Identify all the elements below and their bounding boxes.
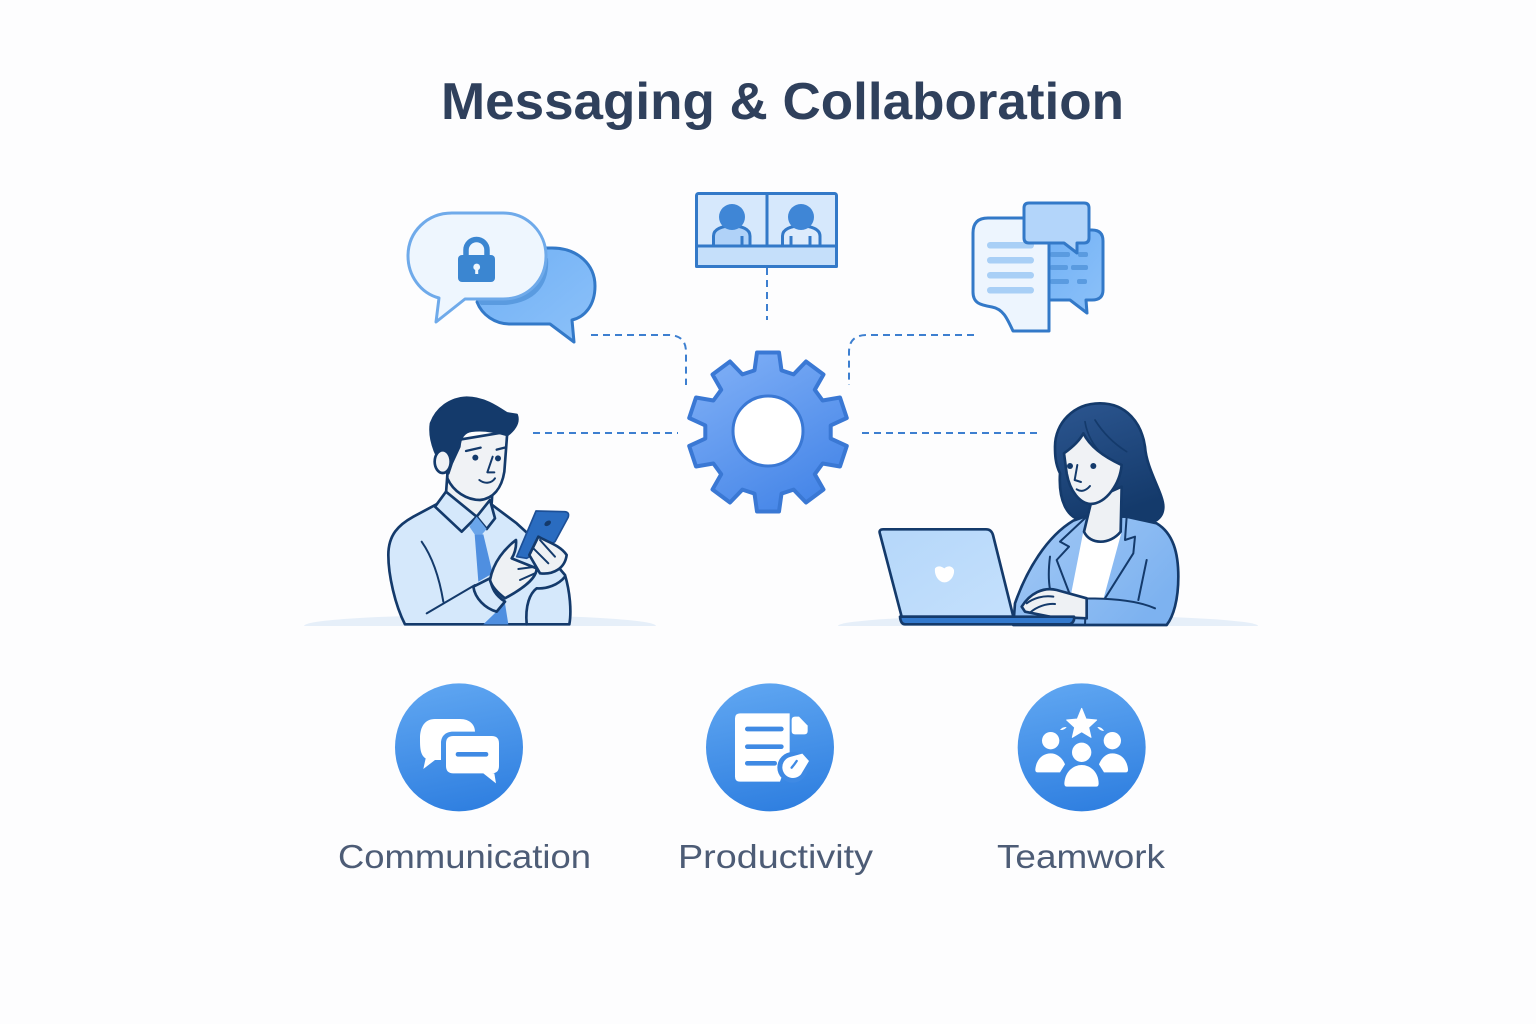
woman with laptop [880,403,1178,625]
hand [490,540,537,598]
icon: padlock [458,240,495,282]
jacket [1013,516,1178,625]
torso [388,503,570,624]
dashed connectors [533,268,1040,433]
icon: documents and comments [973,203,1103,331]
phone [517,511,569,558]
ground shadow right [838,615,1258,637]
ground mask [280,626,1280,642]
icon: encrypted chat bubbles [408,213,595,342]
icon: video call [696,194,836,266]
hand [1022,589,1087,618]
icon: central gear [689,352,847,512]
badge: productivity [706,683,834,811]
badge: teamwork [1018,683,1146,811]
hair [1055,403,1163,524]
laptop [880,529,1013,617]
ground shadow left [304,615,656,637]
face [1064,433,1122,504]
title: Messaging & Collaboration [441,73,1124,131]
head [447,432,507,500]
label: teamwork: Teamwork [997,838,1166,875]
man with smartphone [388,398,570,624]
label: communication: Communication [338,838,591,875]
badge: communication [395,683,523,811]
label: productivity: Productivity [678,838,874,875]
